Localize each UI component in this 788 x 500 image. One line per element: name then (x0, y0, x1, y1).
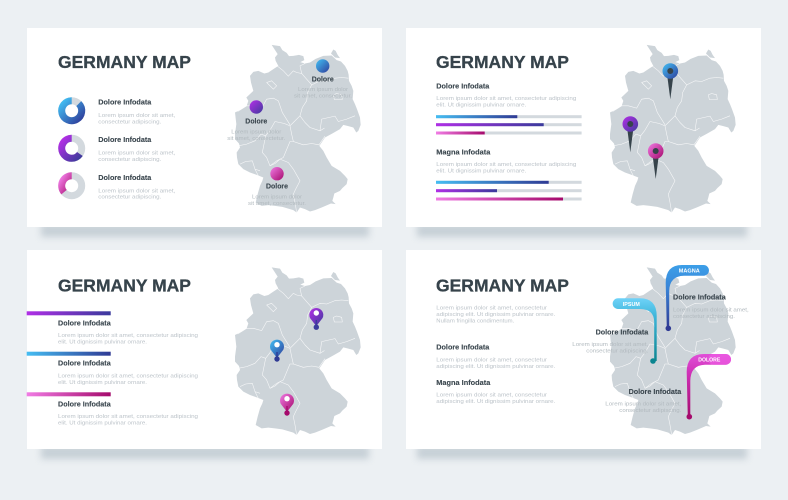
callout: DOLORE (605, 354, 731, 420)
text block: Dolore Infodata: Lorem ipsum dolor sit amet, consectetur (436, 358, 547, 364)
map marker: pink: Lorem ipsum dolor (252, 195, 302, 201)
bar group: Magna Infodata: Magna Infodata (436, 147, 491, 156)
title: GERMANY MAP (58, 276, 191, 296)
ribbon item: blue (27, 352, 198, 386)
pin: pink (648, 143, 664, 179)
map marker: purple: Lorem ipsum dolor (231, 130, 281, 136)
bar group: Magna Infodata (436, 147, 582, 200)
ribbon item: purple: Lorem ipsum dolor sit amet, consectetur adipiscing (58, 333, 198, 339)
callout: MAGNA: Dolore Infodata (673, 293, 727, 302)
callout: DOLORE: DOLORE (698, 357, 721, 363)
text block: Magna Infodata (436, 378, 556, 405)
panel: donut charts (27, 28, 382, 227)
bar group: Dolore Infodata: Lorem ipsum dolor sit amet, consectetur adipiscing (436, 96, 576, 102)
map marker: purple: Dolore (245, 116, 267, 125)
donut row 3 (62, 173, 176, 201)
callout: MAGNA: Lorem ipsum dolor sit amet, (673, 308, 749, 314)
text block: Magna Infodata: Magna Infodata (436, 378, 491, 387)
callout: MAGNA (666, 265, 749, 331)
text block: Magna Infodata: adipiscing elit. Ut dignissim pulvinar ornare. (436, 399, 556, 405)
intro text: Lorem ipsum dolor sit amet, consectetur (436, 306, 547, 312)
pin: blue (662, 63, 678, 99)
intro text (436, 306, 556, 324)
map (610, 267, 736, 435)
ribbon item: pink: Lorem ipsum dolor sit amet, consectetur adipiscing (58, 414, 198, 420)
map (610, 45, 736, 212)
map (235, 267, 361, 435)
map marker: pink: sit amet, consectetur. (248, 201, 306, 207)
title: GERMANY MAP (436, 276, 569, 296)
donut row 2: Lorem ipsum dolor sit amet, (98, 150, 176, 156)
title: GERMANY MAP (58, 52, 191, 72)
callout: DOLORE: Dolore Infodata (629, 387, 682, 396)
bar group: Dolore Infodata: elit. Ut dignissim pulvinar ornare. (436, 102, 527, 108)
pin: purple (309, 308, 323, 330)
callout: IPSUM: consectetur adipiscing. (586, 348, 649, 354)
intro text: Nullam fringilla condimentum. (436, 318, 515, 324)
bar group: Dolore Infodata (436, 81, 582, 134)
text block: Dolore Infodata: adipiscing elit. Ut dignissim pulvinar ornare. (436, 364, 556, 370)
ribbon item: blue: Lorem ipsum dolor sit amet, consectetur adipiscing (58, 374, 198, 380)
pin: pink (280, 394, 294, 416)
pin: purple (622, 116, 638, 152)
donut row 1: consectetur adipiscing. (98, 119, 162, 125)
title: GERMANY MAP (436, 52, 569, 72)
pin: blue (270, 340, 284, 362)
donut row 2: consectetur adipiscing. (98, 157, 162, 163)
ribbon item: pink: Dolore Infodata (58, 399, 112, 408)
callout: MAGNA: MAGNA (679, 269, 700, 275)
ribbon item: blue: elit. Ut dignissim pulvinar ornare. (58, 380, 147, 386)
donut row 3: consectetur adipiscing. (98, 195, 162, 201)
text block: Dolore Infodata: Dolore Infodata (436, 343, 490, 352)
callout: IPSUM: IPSUM (623, 302, 640, 308)
bar group: Magna Infodata: Lorem ipsum dolor sit amet, consectetur adipiscing (436, 162, 576, 168)
map marker: pink (248, 167, 306, 207)
map marker: blue (294, 59, 352, 100)
donut row 2: Dolore Infodata (98, 135, 152, 144)
donut row 3: Dolore Infodata (98, 173, 152, 182)
callout: IPSUM: Lorem ipsum dolor sit amet, (572, 342, 649, 348)
ribbon item: pink (27, 392, 198, 426)
map marker: purple: sit amet, consectetur. (227, 136, 286, 142)
donut row 2 (62, 135, 176, 163)
callout: DOLORE: consectetur adipiscing. (619, 408, 682, 414)
ribbon item: blue: Dolore Infodata (58, 359, 112, 368)
callout: IPSUM: Dolore Infodata (596, 327, 649, 336)
text block: Dolore Infodata (436, 343, 556, 370)
map marker: pink: Dolore (266, 182, 288, 191)
panel: callouts (406, 250, 761, 449)
map marker: blue: sit amet, consectetur. (294, 94, 352, 100)
bar group: Dolore Infodata: Dolore Infodata (436, 81, 490, 90)
map (235, 45, 361, 212)
panel: list with ribbons (27, 250, 382, 449)
intro text: adipiscing elit. Ut dignissim pulvinar ornare. (436, 312, 556, 318)
map marker: purple (227, 100, 286, 142)
donut row 3: Lorem ipsum dolor sit amet, (98, 188, 176, 194)
callout: IPSUM (572, 298, 657, 364)
donut row 1: Dolore Infodata (98, 98, 152, 106)
callout: DOLORE: Lorem ipsum dolor sit amet, (605, 402, 682, 408)
donut row 1 (62, 98, 176, 125)
bar group: Magna Infodata: elit. Ut dignissim pulvinar ornare. (436, 168, 527, 174)
panel shadows (41, 224, 747, 459)
ribbon item: purple: elit. Ut dignissim pulvinar ornare. (58, 339, 147, 345)
callout: MAGNA: consectetur adipiscing. (673, 314, 735, 320)
map marker: blue: Dolore (312, 74, 334, 83)
donut row 1: Lorem ipsum dolor sit amet, (98, 113, 176, 119)
map marker: blue: Lorem ipsum dolor (298, 87, 348, 93)
ribbon item: purple: Dolore Infodata (58, 318, 112, 327)
text block: Magna Infodata: Lorem ipsum dolor sit amet, consectetur (436, 393, 547, 399)
ribbon item: purple (27, 311, 198, 345)
ribbon item: pink: elit. Ut dignissim pulvinar ornare. (58, 420, 147, 426)
panel: progress bars (406, 28, 761, 227)
